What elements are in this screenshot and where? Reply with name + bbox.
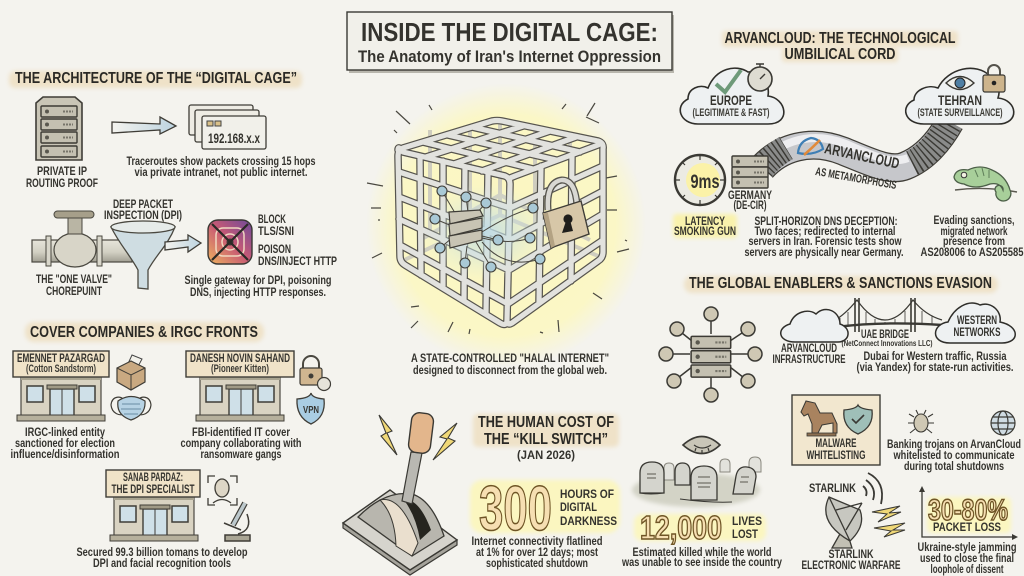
text: connectivity flatlined: Internet connectivity flatlined: [472, 536, 602, 548]
label: germany: [728, 190, 772, 212]
label: private ip routing proof: [26, 166, 98, 190]
panel: human cost: [343, 412, 782, 575]
label: private ip routing proof: ROUTING PROOF: [26, 178, 98, 190]
text: estimated killed: was unable to see inside the country: [621, 557, 782, 569]
label: one valve chokepoint: THE "ONE VALVE": [36, 274, 112, 286]
label: arvancloud infrastructure: INFRASTRUCTURE: [772, 354, 846, 366]
label: arvancloud infrastructure: ARVANCLOUD: [781, 343, 837, 355]
cage glow: [366, 83, 646, 367]
panel: cover companies: [10, 322, 330, 570]
label: block and poison: [258, 214, 337, 268]
text: evading sanctions: presence from: [943, 236, 1005, 248]
text: split horizon: servers in Iran. Forensic tests show: [748, 236, 902, 248]
text: sanab description: DPI and facial recognition tools: [93, 558, 231, 570]
panel: central cage: [366, 83, 646, 377]
label: private ip routing proof: PRIVATE IP: [37, 166, 87, 178]
company: sanab pardaz: SANAB PARDAZ:: [123, 472, 183, 484]
text: sanab description: Secured 99.3 billion tomans to develop: [76, 547, 248, 559]
company: danesh novin sahand: DANESH NOVIN SAHAND: [190, 353, 290, 365]
cloud: europe: (LEGITIMATE & FAST): [692, 107, 770, 119]
icon: graveyard: [632, 457, 761, 507]
arrow: to traceroute: [112, 117, 176, 134]
icon: funnel: [111, 221, 175, 289]
label: block and poison: DNS/INJECT HTTP: [258, 256, 337, 268]
stat: 12,000 lives: LOST: [732, 529, 758, 541]
cage bars: [398, 120, 603, 324]
heading: architecture: THE ARCHITECTURE OF THE “DIGITAL CAGE”: [15, 70, 297, 87]
title: The Anatomy of Iran's Internet Oppression: [358, 47, 661, 66]
cable: arvancloud tube: ARVANCLOUD: [823, 140, 901, 173]
company: emennet pazargad: [13, 351, 109, 421]
icon: bug: [908, 410, 934, 433]
heading: arvancloud: ARVANCLOUD: THE TECHNOLOGICAL: [724, 30, 956, 47]
label: latency smoking gun: [673, 214, 737, 238]
glow rays: [367, 103, 629, 334]
company: emennet pazargad: EMENNET PAZARGAD: [17, 353, 105, 365]
company: emennet pazargad: (Cotton Sandstorm): [26, 363, 96, 375]
icon: satellite dish: [826, 473, 882, 548]
label: deep packet inspection: [104, 199, 182, 222]
icon: latency timer: 9ms: [690, 172, 720, 193]
cloud: arvancloud infrastructure: [781, 309, 848, 342]
text: danesh description: FBI-identified IT cover: [192, 427, 290, 439]
text: split horizon: [744, 216, 904, 259]
icon: vpn shield: VPN: [303, 405, 319, 416]
label: germany: (DE-CIR): [734, 200, 767, 212]
label: arvancloud infrastructure: [772, 343, 846, 366]
text: connectivity flatlined: at 1% for over 12 days; most: [476, 547, 598, 559]
icon: ballot box: [117, 355, 145, 390]
text: traceroutes: [126, 156, 316, 179]
icon: face mask: [111, 396, 151, 420]
cloud: western networks: WESTERN: [957, 315, 997, 327]
text: traceroutes: via private intranet, not public internet.: [134, 167, 308, 179]
label: uae bridge: (NetConnect Innovations LLC): [842, 339, 933, 348]
label: block and poison: BLOCK: [258, 214, 286, 226]
title: [347, 12, 674, 73]
caption: halal internet: A STATE-CONTROLLED "HALAL INTERNET": [411, 353, 609, 365]
text: connectivity flatlined: [472, 536, 602, 570]
heading: human cost: THE “KILL SWITCH”: [484, 431, 608, 448]
text: estimated killed: Estimated killed while the world: [632, 547, 772, 559]
company: danesh novin sahand: [186, 351, 294, 421]
label: uae bridge: [842, 329, 933, 348]
text: dubai: [856, 351, 1014, 374]
heading: human cost: THE HUMAN COST OF: [478, 414, 614, 431]
icon: germany server: [732, 156, 768, 188]
callout: malware whitelisting: WHITELISTING: [806, 450, 866, 462]
label: starlink: STARLINK: [809, 483, 857, 495]
icon: lock and coin: [300, 356, 330, 390]
icon: microscope: [224, 503, 250, 541]
icon: chameleon: [954, 167, 1017, 201]
text: sanab description: [76, 547, 248, 570]
icon: lightning bolts: [379, 415, 457, 460]
heading: cover companies: [25, 322, 264, 342]
label: starlink electronic warfare: STARLINK: [828, 549, 874, 561]
icon: traceroute windows: [189, 105, 266, 149]
label: deep packet inspection: INSPECTION (DPI): [104, 210, 182, 222]
icon: padlock: [543, 180, 589, 248]
label: one valve chokepoint: CHOREPUINT: [46, 286, 102, 298]
stat: 300 hours: HOURS OF: [560, 489, 614, 501]
text: danesh description: company collaborating with: [180, 438, 302, 450]
icon: traceroute windows: 192.168.x.x: [208, 130, 260, 146]
text: split horizon: Two faces; redirected to internal: [754, 226, 896, 238]
text: connectivity flatlined: sophisticated shutdown: [486, 558, 588, 570]
icon: valve pipe: [32, 211, 132, 267]
icon: server rack: [36, 97, 82, 160]
stat: 300 hours: DIGITAL: [560, 502, 597, 514]
arrow: to blocked app: [165, 235, 201, 252]
icon: facial recognition: [208, 476, 237, 505]
label: starlink electronic warfare: [802, 549, 901, 572]
label: latency smoking gun: SMOKING GUN: [674, 226, 736, 238]
company: sanab pardaz: [106, 470, 200, 541]
text: split horizon: servers are physically near Germany.: [744, 247, 904, 259]
text: banking trojans: [887, 439, 1021, 473]
label: uae bridge: UAE BRIDGE: [861, 329, 909, 341]
text: single gateway: [184, 275, 332, 299]
icon: globe: [991, 411, 1015, 435]
text: single gateway: Single gateway for DPI, poisoning: [184, 275, 332, 287]
company: danesh novin sahand: (Pioneer Kitten): [211, 363, 269, 375]
label: block and poison: TLS/SNI: [258, 226, 294, 238]
title: INSIDE THE DIGITAL CAGE:: [361, 17, 658, 47]
cloud: western networks: NETWORKS: [954, 327, 1001, 339]
stat: 300 hours: 300: [479, 474, 552, 544]
text: traceroutes: Traceroutes show packets crossing 15 hops: [126, 156, 316, 168]
cloud: tehran: TEHRAN: [938, 92, 982, 108]
panel: architecture of the digital cage: [9, 70, 337, 299]
text: emennet description: [10, 427, 120, 461]
caption: halal internet: designed to disconnect from the global web.: [413, 365, 607, 377]
text: emennet description: sanctioned for election: [15, 438, 115, 450]
chart: packet loss: PACKET LOSS: [933, 522, 1001, 534]
icon: latency timer: [675, 155, 725, 205]
label: latency smoking gun: LATENCY: [685, 216, 725, 228]
icon: kill switch lever: [343, 412, 457, 575]
heading: human cost: (JAN 2026): [517, 450, 575, 462]
cloud: tehran: [906, 65, 1014, 124]
icon: network hub: [659, 307, 762, 402]
heading: arvancloud: [722, 30, 958, 63]
label: starlink electronic warfare: ELECTRONIC WARFARE: [802, 560, 901, 572]
cloud: western networks: [936, 303, 1015, 343]
text: danesh description: ransomware gangs: [200, 449, 282, 461]
text: single gateway: DNS, injecting HTTP responses.: [190, 287, 326, 299]
chart: packet loss: [919, 486, 1018, 540]
cage back bars: [400, 122, 603, 262]
heading: arvancloud: UMBILICAL CORD: [784, 46, 896, 63]
cloud: europe: EUROPE: [710, 92, 752, 108]
label: as metamorphosis: AS METAMORPHOSIS: [814, 166, 897, 192]
icon: vpn shield: [297, 393, 324, 424]
label: one valve chokepoint: [36, 274, 112, 298]
text: emennet description: IRGC-linked entity: [25, 427, 105, 439]
icon: jamming bolts: [872, 506, 905, 537]
text: estimated killed: [621, 547, 782, 569]
icon: uae bridge: [832, 298, 942, 332]
stat: 12,000 lives: 12,000: [640, 509, 722, 546]
panel: arvancloud: [673, 30, 1024, 259]
text: split horizon: SPLIT-HORIZON DNS DECEPTION:: [754, 216, 898, 228]
label: germany: GERMANY: [728, 190, 772, 202]
text: emennet description: influence/disinformation: [10, 449, 120, 461]
text: danesh description: [180, 427, 302, 461]
callout: malware whitelisting: [792, 395, 880, 465]
caption: halal internet: [411, 353, 609, 377]
label: block and poison: POISON: [258, 244, 291, 256]
icon: blocked instagram: [208, 220, 252, 264]
heading: cover companies: COVER COMPANIES & IRGC FRONTS: [30, 324, 258, 341]
label: deep packet inspection: DEEP PACKET: [113, 199, 173, 211]
heading: human cost: [473, 414, 619, 462]
cloud: europe: [680, 64, 784, 124]
panel: global enablers: [659, 275, 1021, 576]
callout: malware whitelisting: MALWARE: [816, 438, 857, 450]
network inside cage: [419, 184, 551, 280]
stat: 12,000 lives: LIVES: [732, 516, 762, 528]
text: evading sanctions: [920, 215, 1024, 259]
icon: closed eye: [683, 436, 720, 454]
stat: 300 hours: DARKNESS: [560, 516, 617, 528]
company: sanab pardaz: THE DPI SPECIALIST: [112, 484, 194, 496]
cable: arvancloud tube: [762, 122, 950, 173]
text: ukraine jamming: [918, 542, 1016, 576]
